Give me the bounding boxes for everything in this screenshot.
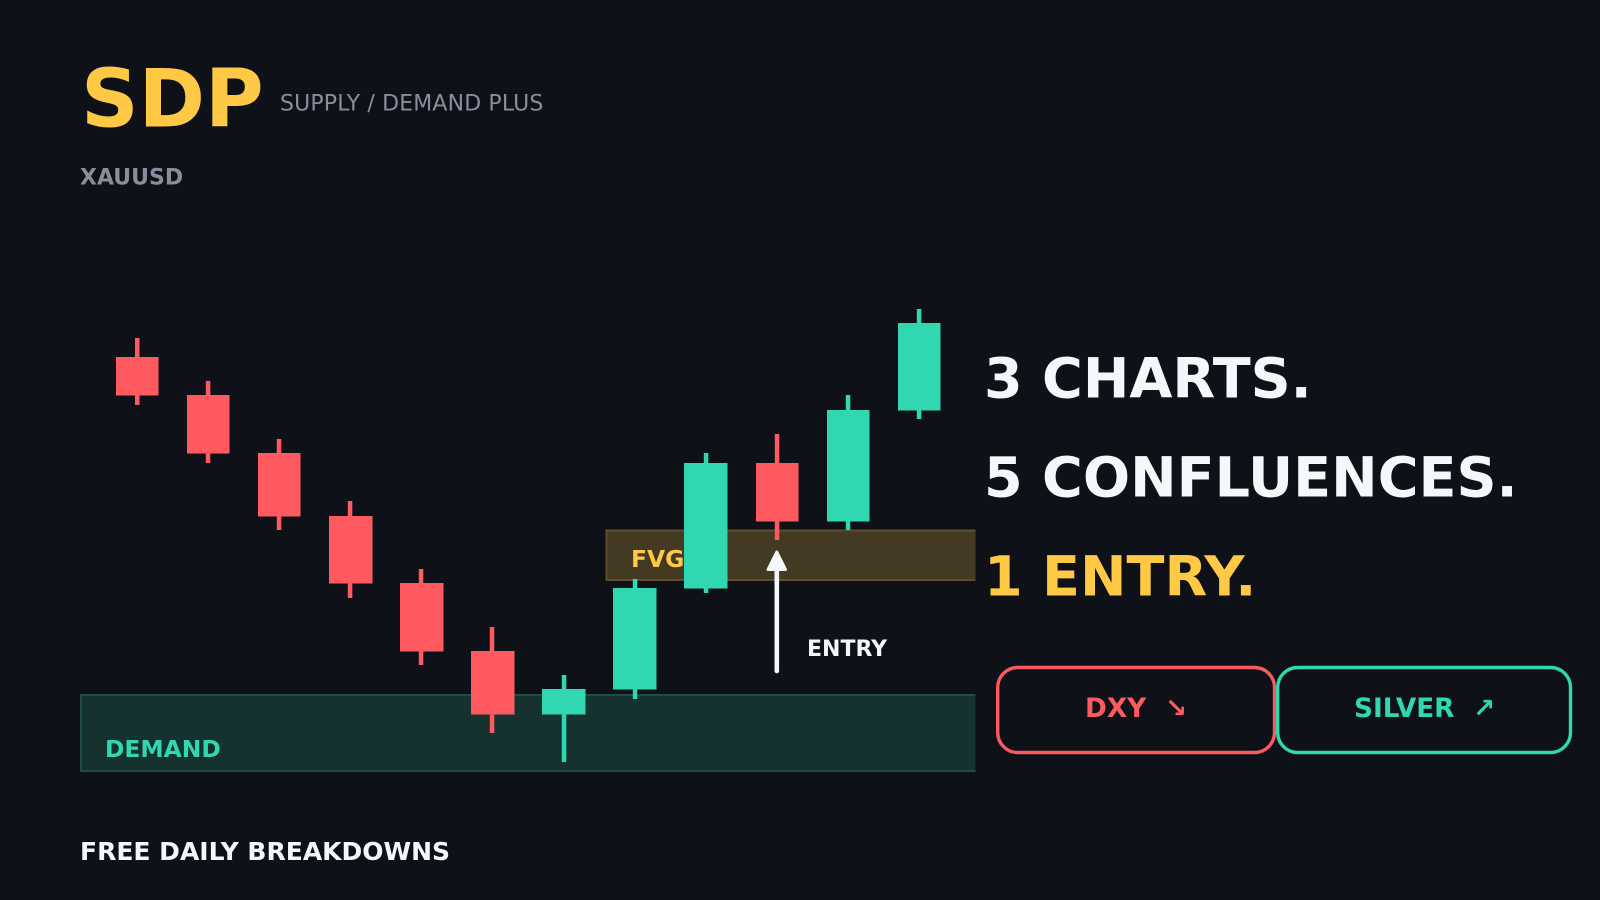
- candle 11: [827, 395, 870, 530]
- candle 1: [116, 338, 158, 405]
- header: brand: [80, 52, 544, 190]
- arrow: entry: [768, 552, 786, 671]
- candle 2: [187, 381, 230, 463]
- FVG zone: [606, 530, 976, 580]
- candle 7: [542, 675, 586, 762]
- candlestick chart: [116, 309, 940, 762]
- headline line 1: 3 CHARTS.: [984, 346, 1312, 412]
- badge: DXY: [998, 668, 1274, 752]
- title: SDP: SDP: [81, 52, 264, 146]
- FVG label: FVG: [631, 545, 684, 573]
- badge label: DXY: DXY: [1085, 694, 1147, 724]
- candle 12: [898, 309, 940, 419]
- candle 5: [400, 569, 444, 665]
- icon: arrow down: ↘: [1165, 694, 1187, 724]
- candle 3: [258, 439, 300, 530]
- candle 4: [329, 501, 372, 598]
- badge label: SILVER: SILVER: [1354, 694, 1454, 724]
- headline: [984, 346, 1518, 610]
- candle 10: [756, 434, 798, 540]
- instrument label: XAUUSD: [80, 166, 183, 190]
- demand label: DEMAND: [105, 735, 221, 763]
- footer call to action: FREE DAILY BREAKDOWNS: [80, 837, 450, 866]
- demand zone: [81, 695, 976, 771]
- headline line 3: 1 ENTRY.: [984, 544, 1256, 610]
- entry label: ENTRY: [807, 637, 888, 662]
- subtitle: SUPPLY / DEMAND PLUS: [280, 92, 544, 116]
- candle 9: [684, 453, 728, 593]
- badge: SILVER: [1278, 668, 1570, 752]
- headline line 2: 5 CONFLUENCES.: [984, 446, 1518, 510]
- icon: arrow up: ↗: [1473, 694, 1495, 724]
- candle 6: [471, 627, 514, 733]
- candle 8: [613, 579, 656, 699]
